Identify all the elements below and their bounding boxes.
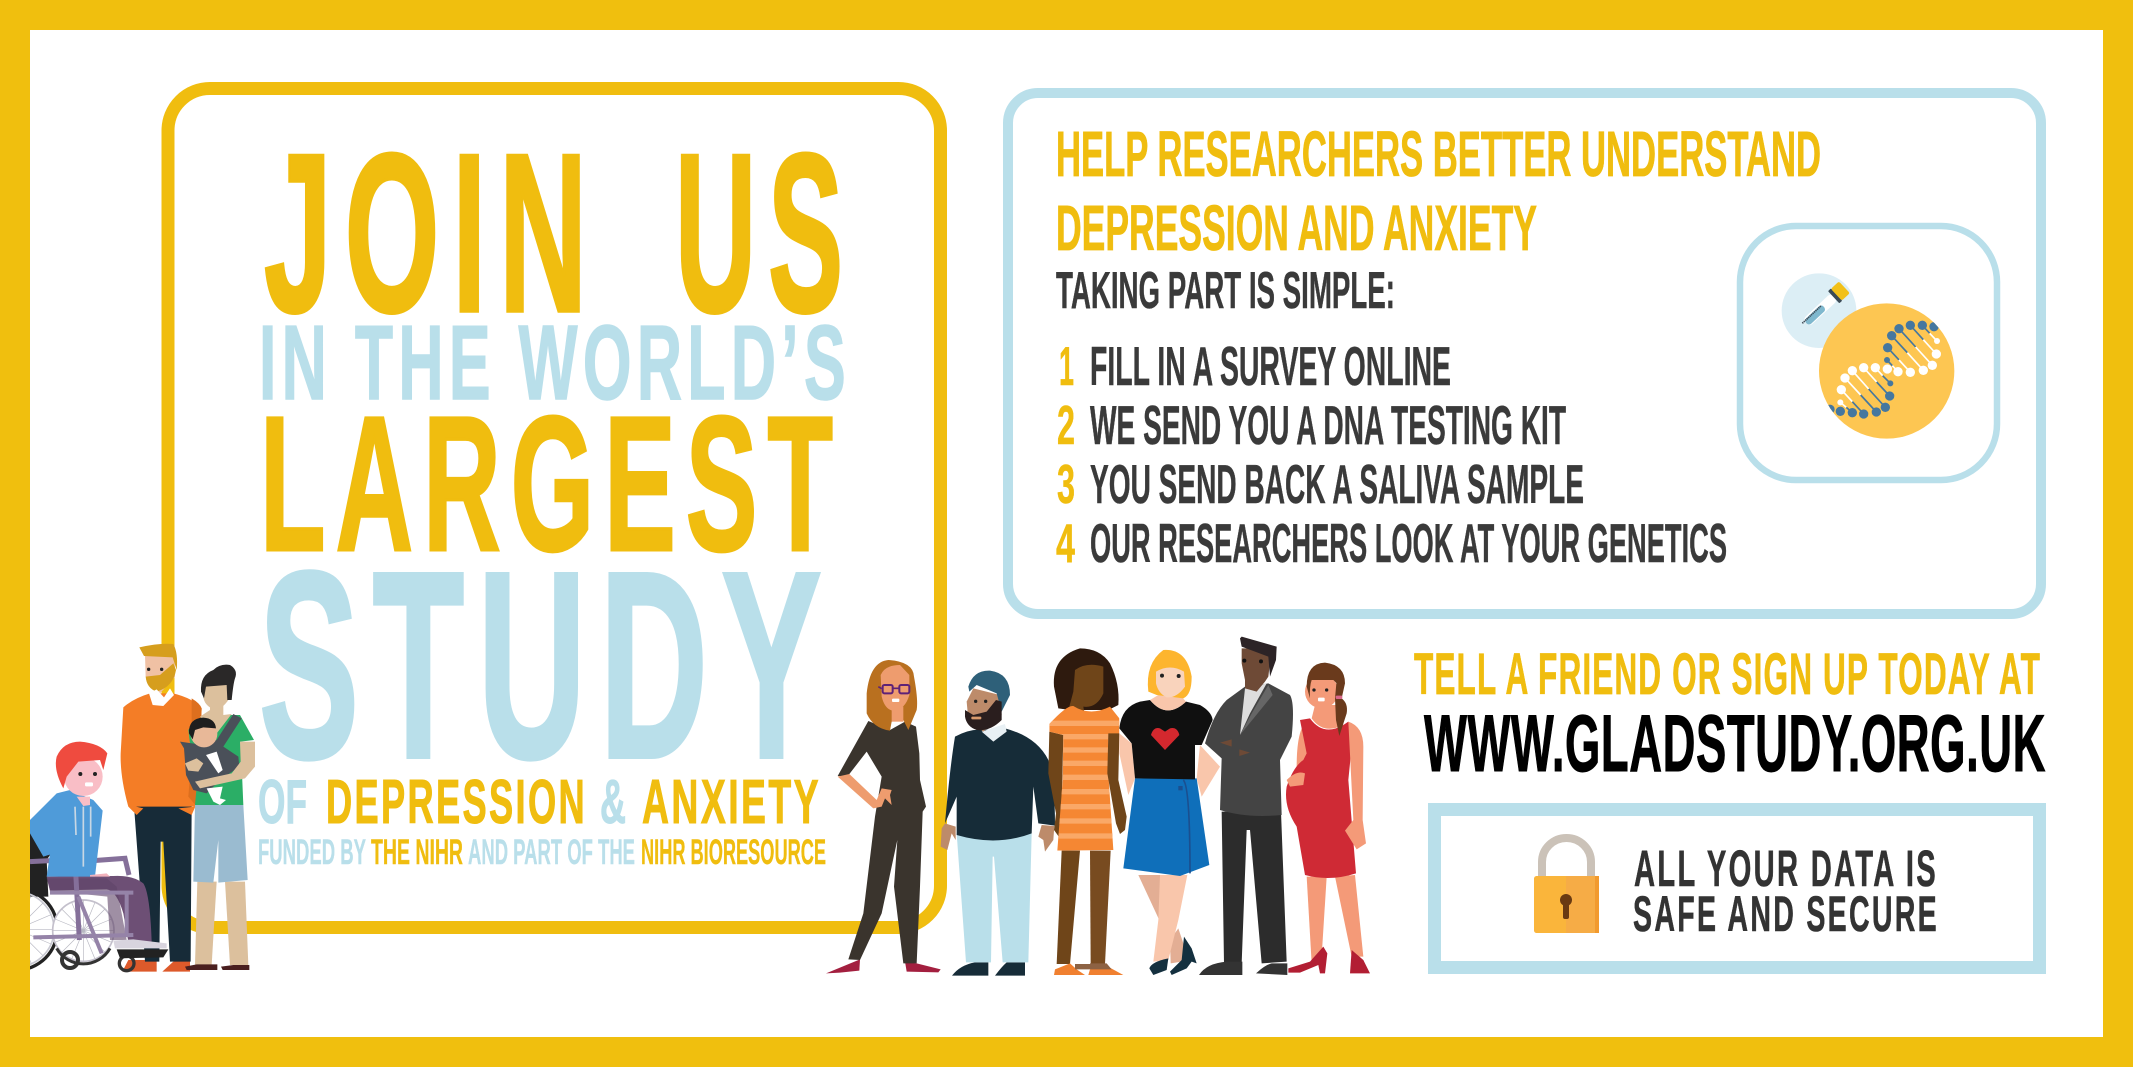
person: woman with baby [180,665,255,970]
panel: join us headline box [168,88,940,928]
funding note: THE NIHR [371,833,463,872]
step 2: 2 [1057,394,1075,456]
step 3: YOU SEND BACK A SALIVA SAMPLE [1090,453,1584,515]
step 1: 1 [1059,335,1074,397]
heading: study: STUDY [259,517,835,814]
step 4 [1056,512,1727,574]
person: woman with glasses [826,660,941,973]
illustration: group of adults, left [826,660,1055,976]
panel: how to take part [1008,93,2041,614]
subheading: TAKING PART IS SIMPLE: [1056,262,1395,320]
person: pregnant woman in red dress [1286,663,1370,973]
step 1 [1059,335,1451,397]
heading: largest: LARGEST [260,376,843,591]
step 2: WE SEND YOU A DNA TESTING KIT [1090,394,1566,456]
icon panel: dna and sample vial [1740,226,1997,480]
step 2 [1057,394,1566,456]
heading: of depression and anxiety: OF [258,768,307,837]
person: man in turban [941,671,1055,976]
heading: of depression and anxiety: ANXIETY [642,768,821,837]
funding note: FUNDED BY [258,833,366,872]
heading: in the world's: IN THE WORLD’S [259,304,851,422]
heading: join us: JOIN [264,106,600,359]
person: boy in wheelchair [0,742,168,971]
person: blonde woman with heart t-shirt [1119,650,1220,975]
step 4: 4 [1056,512,1075,574]
person: woman in striped dress [1047,648,1127,975]
person: man in dark suit [1199,637,1293,975]
panel outline [1008,93,2041,614]
funding note [258,833,826,872]
step 1: FILL IN A SURVEY ONLINE [1090,335,1451,397]
heading: depression and anxiety: DEPRESSION AND ANXIETY [1056,192,1537,264]
illustration: family with wheelchair user [0,644,255,972]
funding note: NIHR BIORESOURCE [641,833,826,872]
heading: of depression and anxiety: & [600,768,626,837]
security message [1633,840,1939,942]
panel: data security [1434,810,2040,968]
step 3: 3 [1057,453,1075,515]
illustration: group of adults, right [1047,637,1370,975]
funding note: AND PART OF THE [468,833,635,872]
box outline [168,88,940,928]
heading: of depression and anxiety: DEPRESSION [326,768,587,837]
panel: join us headline box: US [675,106,855,359]
icon: padlock [1534,838,1599,933]
person: man in orange sweater [121,644,202,972]
step 3 [1057,453,1584,515]
